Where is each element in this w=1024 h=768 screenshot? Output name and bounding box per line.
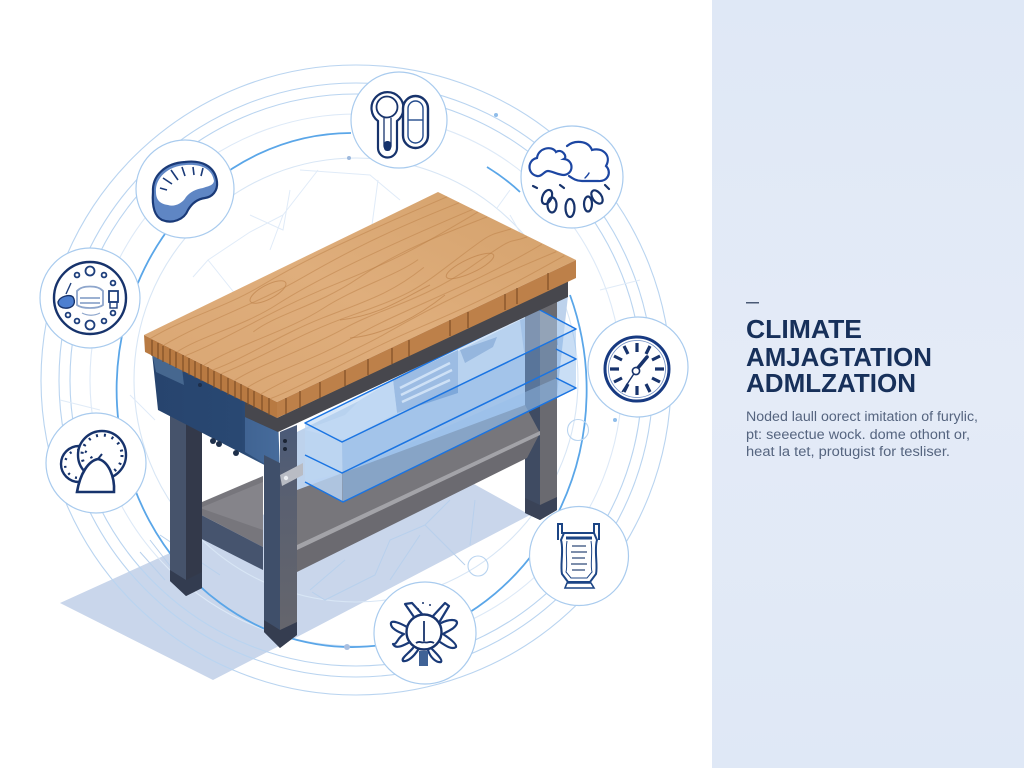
heading: AMJAGTATION bbox=[746, 342, 932, 372]
heading bbox=[746, 314, 932, 398]
icon: dial with controls bbox=[40, 248, 140, 348]
glass shelves bbox=[305, 309, 576, 502]
icon: dual gauge bbox=[46, 413, 146, 513]
body text: pt: seeectue wock. dome othont or, bbox=[746, 427, 970, 442]
icon: sun face bbox=[374, 582, 476, 684]
concentric rings bbox=[41, 65, 671, 695]
table: dark band under top bbox=[245, 280, 568, 432]
body text: heat la tet, protugist for tesliser. bbox=[746, 444, 950, 459]
heading: CLIMATE bbox=[746, 314, 862, 344]
icon: thermometer and capsule bbox=[351, 72, 447, 168]
table: wood top bbox=[144, 192, 576, 418]
body text bbox=[746, 409, 978, 459]
icon: curved gauge bbox=[136, 140, 234, 238]
panel: right sidebar bbox=[712, 0, 1024, 768]
internal equipment bbox=[305, 310, 558, 440]
table: left apron bbox=[152, 353, 280, 473]
heading: ADMLZATION bbox=[746, 368, 916, 398]
wood grain bbox=[149, 194, 568, 401]
table shadow bbox=[60, 478, 530, 680]
wood front edge bbox=[144, 335, 277, 418]
table: back right leg bbox=[525, 285, 557, 520]
icon: clouds and rain bbox=[521, 126, 623, 228]
icon: wall clock bbox=[588, 317, 688, 417]
faint network lines bbox=[60, 170, 640, 420]
table: front leg bbox=[264, 425, 303, 648]
body text: Noded laull oorect imitation of furylic, bbox=[746, 409, 978, 424]
icon: filter canister bbox=[530, 506, 628, 606]
small accent rule bbox=[746, 302, 759, 304]
glass enclosure backdrop bbox=[297, 296, 568, 530]
table: lower shelf bbox=[188, 405, 540, 572]
table: left leg bbox=[170, 405, 202, 596]
